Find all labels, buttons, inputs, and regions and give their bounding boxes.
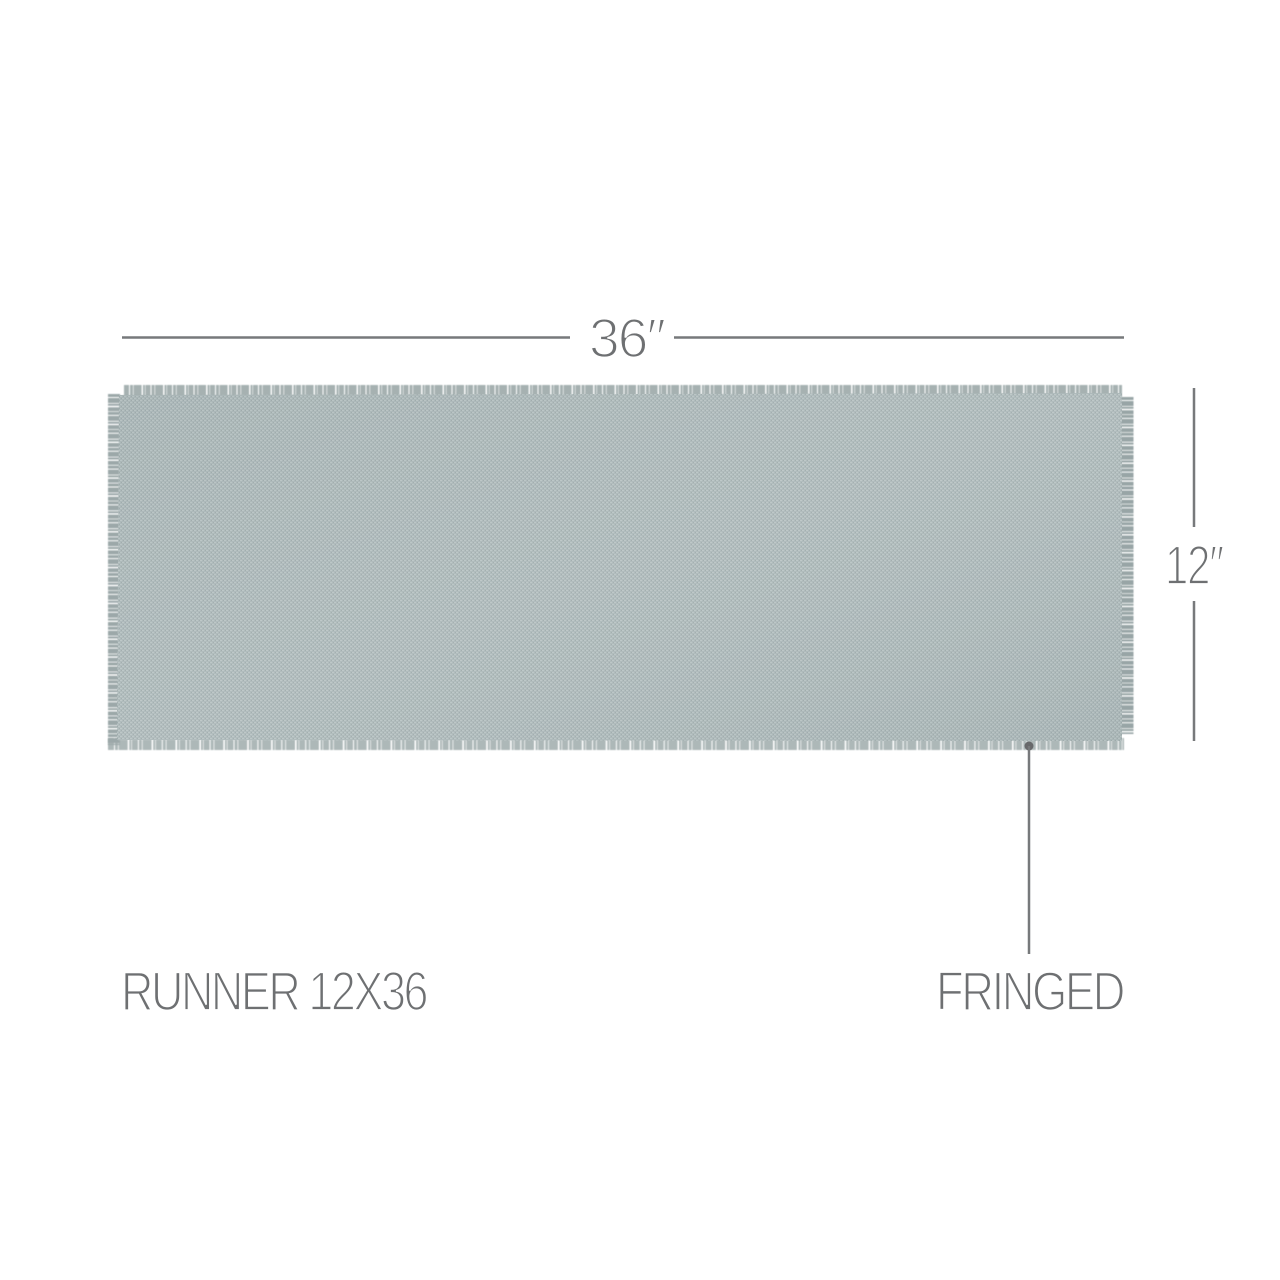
fabric body [117,393,1122,741]
height dimension: 12 inches: 12″ [1165,534,1224,596]
callout: fringed leader line [1024,742,1034,954]
fringe: right edge [1120,397,1134,734]
fringe: left edge [108,394,120,745]
label: runner size: RUNNER 12X36 [121,960,427,1022]
width dimension: 36 inches: 36″ [589,307,666,369]
runner: fringed table runner fabric [108,391,1127,745]
fringe: top edge [124,385,1122,397]
fringe: bottom edge [108,738,1124,750]
label: fringed: FRINGED [936,960,1124,1022]
